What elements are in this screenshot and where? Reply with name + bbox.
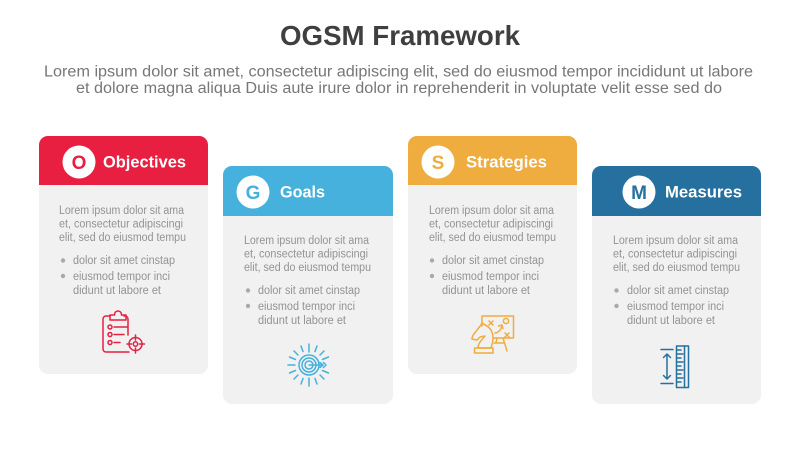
icon: ruler with height arrow <box>661 346 688 388</box>
subtitle: et dolore magna aliqua Duis aute irure dolor in reprehenderit in voluptate velit esse sed do <box>76 80 722 97</box>
panel: strategies: Strategies <box>466 154 547 172</box>
panel: goals: eiusmod tempor inci <box>258 301 355 313</box>
title: OGSM Framework <box>280 20 520 51</box>
panel: goals: Lorem ipsum dolor sit ama <box>244 235 370 247</box>
panel: objectives: et, consectetur adipiscingi <box>59 218 183 230</box>
panel: goals <box>223 166 393 404</box>
icon: radiating target <box>288 344 328 386</box>
panel: objectives <box>39 136 208 374</box>
panel: measures <box>592 166 761 404</box>
icon: chess knight and tactics board <box>472 316 514 353</box>
panel: strategies: dolor sit amet cinstap <box>442 255 544 267</box>
panel: goals: Goals <box>280 184 325 202</box>
panel: strategies: elit, sed do eiusmod tempu <box>429 232 556 244</box>
panel: measures: Measures <box>665 184 742 202</box>
panel: objectives: O <box>72 153 86 174</box>
panel: goals: et, consectetur adipiscingi <box>244 248 368 260</box>
panel: measures: et, consectetur adipiscingi <box>613 248 737 260</box>
panel: goals: dolor sit amet cinstap <box>258 285 360 297</box>
panel: objectives: didunt ut labore et <box>73 285 162 297</box>
panel: objectives: Lorem ipsum dolor sit ama <box>59 205 185 217</box>
panel: measures: eiusmod tempor inci <box>627 301 724 313</box>
icon: clipboard with target <box>103 311 144 353</box>
panel: strategies: Lorem ipsum dolor sit ama <box>429 205 555 217</box>
panel: objectives: Objectives <box>103 154 186 172</box>
panel: strategies: eiusmod tempor inci <box>442 271 539 283</box>
panel: strategies: didunt ut labore et <box>442 285 531 297</box>
subtitle: Lorem ipsum dolor sit amet, consectetur adipiscing elit, sed do eiusmod tempor incididunt ut labore <box>44 64 753 80</box>
panel: measures: M <box>631 183 647 204</box>
panel: objectives: eiusmod tempor inci <box>73 271 170 283</box>
panel: strategies: et, consectetur adipiscingi <box>429 218 553 230</box>
panel: measures: didunt ut labore et <box>627 315 716 327</box>
panel: measures: dolor sit amet cinstap <box>627 285 729 297</box>
panel: strategies: S <box>432 153 444 174</box>
panel: objectives: dolor sit amet cinstap <box>73 255 175 267</box>
panel: goals: didunt ut labore et <box>258 315 347 327</box>
panel: goals: elit, sed do eiusmod tempu <box>244 262 371 274</box>
panel: goals: G <box>246 183 260 204</box>
panel: measures: elit, sed do eiusmod tempu <box>613 262 740 274</box>
subtitle <box>44 64 753 97</box>
panel: measures: Lorem ipsum dolor sit ama <box>613 235 739 247</box>
panel: strategies <box>408 136 577 374</box>
panel: objectives: elit, sed do eiusmod tempu <box>59 232 186 244</box>
